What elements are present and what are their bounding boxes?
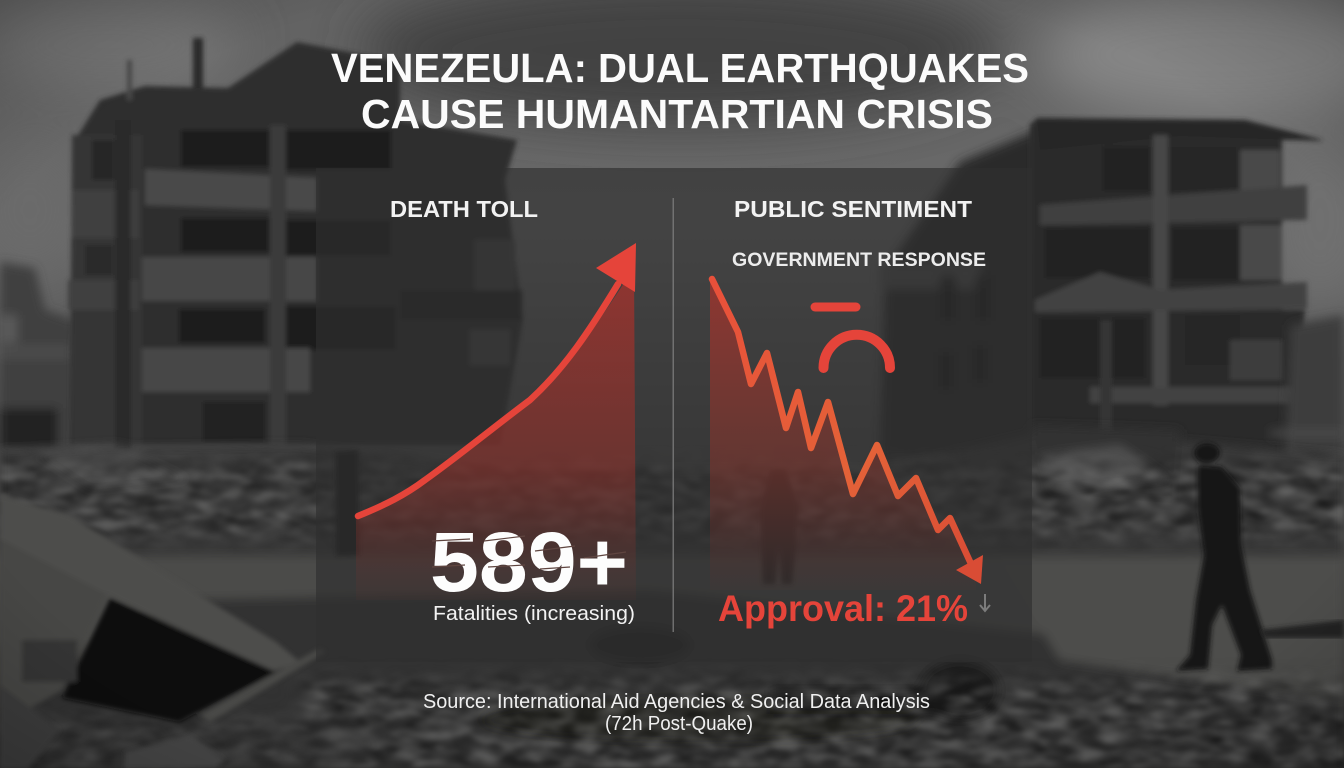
storm clouds bbox=[0, 0, 1344, 310]
left ruined building bbox=[68, 38, 523, 450]
panel: public sentiment bbox=[710, 196, 990, 629]
area fill under curve bbox=[356, 268, 636, 600]
collapsed slab foreground bbox=[0, 495, 326, 768]
rising line bbox=[358, 284, 618, 516]
stat: 589+: 589+ bbox=[430, 515, 628, 609]
source note: (72h Post-Quake) bbox=[605, 713, 753, 735]
left tower and balconies bbox=[72, 135, 142, 445]
person silhouette bbox=[1176, 443, 1272, 671]
debris streak right bbox=[1260, 620, 1344, 638]
slabs bbox=[145, 169, 317, 211]
panel: death toll bbox=[356, 196, 636, 625]
arrowhead bbox=[596, 243, 636, 292]
area fill under line bbox=[710, 280, 976, 590]
icon: small down arrow bbox=[980, 594, 990, 611]
inner right side behind panel bbox=[400, 290, 522, 320]
second blurred figure in centre bbox=[335, 450, 798, 584]
distant building left bbox=[0, 262, 75, 450]
chart: falling approval area bbox=[710, 279, 983, 590]
heading: public sentiment: PUBLIC SENTIMENT bbox=[734, 196, 972, 222]
panel: translucent main card bbox=[316, 168, 1032, 662]
building behind panel bbox=[880, 130, 1037, 460]
divider between columns bbox=[672, 198, 674, 632]
title: CAUSE HUMANTARTIAN CRISIS bbox=[361, 91, 993, 137]
rubble and ground bbox=[0, 425, 1344, 768]
arrowhead bbox=[956, 555, 983, 584]
subheading: government response: GOVERNMENT RESPONSE bbox=[732, 249, 986, 271]
label: fatalities: Fatalities (increasing) bbox=[433, 603, 635, 625]
floor 1 windows bbox=[181, 130, 269, 167]
source note: Source: International Aid Agencies & Social Data Analysis bbox=[423, 691, 930, 713]
rubble mottling texture bbox=[0, 445, 1344, 768]
heading: death toll: DEATH TOLL bbox=[390, 196, 538, 222]
chart: rising death toll area bbox=[356, 243, 636, 600]
title bbox=[331, 45, 1029, 137]
distant building right bbox=[1270, 315, 1344, 460]
right ruined building bbox=[1030, 118, 1323, 470]
icon: sad face mark bbox=[815, 307, 890, 368]
stat: approval 21%: Approval: 21% bbox=[718, 588, 968, 629]
falling line bbox=[712, 279, 972, 566]
title: VENEZEULA: DUAL EARTHQUAKES bbox=[331, 45, 1029, 91]
source note bbox=[423, 691, 930, 735]
